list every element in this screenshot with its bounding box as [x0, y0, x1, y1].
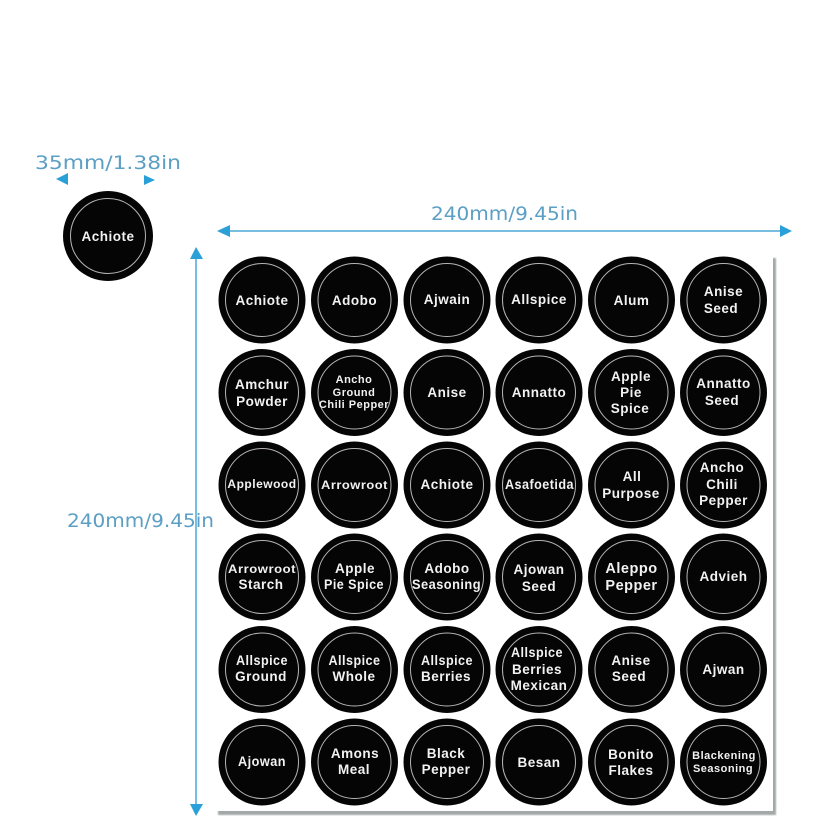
sticker: Allspice Berries Mexican: Mexican [511, 678, 567, 693]
sticker: Aleppo Pepper: Pepper [605, 578, 658, 594]
sticker: Apple Pie Spice [588, 349, 675, 436]
sticker: Achiote [218, 256, 306, 344]
sticker: Ancho Chili Pepper: Ancho [700, 460, 744, 475]
sticker: Arrowroot Starch: Starch [238, 577, 284, 592]
sticker: Anise Seed: Seed [612, 669, 646, 684]
sticker: Amons Meal: Amons [331, 746, 379, 761]
sticker: Allspice: Allspice [511, 292, 567, 307]
sticker: Besan [496, 718, 582, 806]
sticker: Adobo Seasoning [404, 534, 490, 620]
sticker: Anise Seed [680, 256, 767, 344]
dimension: sheet height [67, 247, 214, 816]
sticker: Arrowroot Starch [218, 534, 306, 620]
dimension: sticker diameter [35, 152, 181, 185]
sticker: Apple Pie Spice: Spice [611, 401, 649, 416]
sticker: Achiote [404, 442, 490, 528]
sticker sheet [214, 254, 776, 815]
single sample sticker: Achiote [81, 229, 135, 244]
dimension: sticker diameter: 35mm/1.38in [35, 152, 181, 174]
sticker: Allspice Berries Mexican: Allspice [511, 645, 563, 660]
sticker: Apple Pie Spice: Pie [620, 385, 642, 400]
sticker: Ajwain [404, 256, 490, 344]
sticker: Asafoetida [496, 442, 582, 528]
sticker: Ajwan: Ajwan [702, 662, 745, 677]
sticker: Black Pepper [404, 718, 490, 806]
sticker: Ancho Chili Pepper [680, 442, 767, 528]
sticker: Adobo Seasoning: Seasoning [412, 577, 481, 592]
sticker: Annatto Seed: Annatto [696, 376, 751, 391]
sticker: Blackening Seasoning: Blackening [692, 750, 756, 762]
sticker: Aleppo Pepper [588, 534, 675, 620]
sticker: Arrowroot: Arrowroot [321, 478, 388, 492]
sticker: Black Pepper: Black [427, 746, 465, 761]
sticker: Apple Pie Spice: Apple [611, 369, 651, 384]
sticker: Ajowan Seed: Ajowan [513, 562, 565, 577]
sticker: Ancho Ground Chili Pepper: Chili Pepper [319, 399, 389, 411]
dimension: sheet height: 240mm/9.45in [67, 510, 214, 532]
sticker: Amchur Powder: Powder [236, 394, 288, 409]
sticker: Achiote: Achiote [420, 477, 474, 492]
sticker: Anise Seed: Seed [704, 301, 738, 316]
sticker: Anise Seed: Anise [704, 284, 743, 299]
sticker: Advieh: Advieh [699, 569, 748, 584]
sticker: Apple Pie Spice: Apple [335, 561, 375, 576]
sticker: Ancho Chili Pepper: Chili [706, 477, 738, 492]
sticker: Blackening Seasoning [680, 718, 767, 806]
sticker: Allspice [496, 256, 582, 344]
sticker: Bonito Flakes [588, 718, 675, 806]
sticker: Besan: Besan [517, 755, 561, 770]
sticker: Blackening Seasoning: Seasoning [693, 763, 753, 775]
sticker: Amons Meal [311, 718, 398, 806]
sticker: Achiote: Achiote [235, 293, 289, 308]
sticker: All Purpose: All [623, 469, 641, 484]
sticker: All Purpose: Purpose [602, 486, 660, 501]
sticker: Amchur Powder [218, 349, 306, 436]
sticker: Arrowroot Starch: Arrowroot [228, 562, 296, 576]
sticker: Allspice Berries: Allspice [421, 653, 473, 668]
sticker: Ajowan Seed: Seed [522, 579, 556, 594]
sticker: Apple Pie Spice [311, 534, 398, 620]
sticker: Annatto [496, 349, 582, 436]
sticker: Adobo [311, 256, 398, 344]
sticker: Allspice Ground: Allspice [236, 653, 288, 668]
sticker: Allspice Ground [218, 626, 306, 713]
sticker: Advieh [680, 534, 767, 620]
sticker: Allspice Whole: Whole [332, 669, 376, 684]
sticker: Ancho Ground Chili Pepper: Ground [333, 387, 375, 399]
single sample sticker [63, 191, 153, 281]
sticker: Ancho Chili Pepper: Pepper [699, 493, 748, 508]
dimension: sheet width [217, 203, 792, 237]
sticker: Allspice Ground: Ground [235, 669, 287, 684]
sticker: Annatto Seed [680, 349, 767, 436]
sticker: Allspice Berries Mexican: Berries [512, 662, 562, 677]
sticker: Ancho Ground Chili Pepper: Ancho [336, 374, 372, 386]
sticker: Amons Meal: Meal [338, 762, 370, 777]
sticker: Asafoetida: Asafoetida [505, 477, 574, 492]
sticker: Ajwan [680, 626, 767, 713]
sticker: Annatto: Annatto [512, 385, 566, 400]
sticker: All Purpose [588, 442, 675, 528]
sticker: Allspice Whole [311, 626, 398, 713]
sticker: Ajwain: Ajwain [424, 292, 470, 307]
sticker: Bonito Flakes: Flakes [608, 763, 654, 778]
sticker: Annatto Seed: Seed [705, 393, 739, 408]
sticker: Amchur Powder: Amchur [235, 377, 289, 392]
sticker: Black Pepper: Pepper [422, 762, 471, 777]
sticker: Ajowan [218, 718, 306, 806]
sticker: Anise: Anise [427, 385, 467, 400]
sticker: Ancho Ground Chili Pepper [311, 349, 398, 436]
sticker: Anise [404, 349, 490, 436]
sticker: Alum: Alum [614, 293, 649, 308]
sticker: Arrowroot [311, 442, 398, 528]
sticker: Apple Pie Spice: Pie Spice [324, 577, 384, 592]
dimension: sheet width: 240mm/9.45in [431, 203, 578, 225]
sticker: Applewood [218, 442, 306, 528]
sticker: Anise Seed: Anise [611, 653, 651, 668]
sticker: Ajowan Seed [496, 534, 582, 620]
sticker: Allspice Whole: Allspice [328, 653, 380, 668]
sticker: Alum [588, 256, 675, 344]
sticker: Allspice Berries: Berries [421, 669, 471, 684]
sticker: Aleppo Pepper: Aleppo [605, 561, 658, 577]
sticker: Allspice Berries Mexican [496, 626, 582, 713]
sticker: Adobo Seasoning: Adobo [424, 561, 470, 576]
sticker: Applewood: Applewood [227, 477, 297, 491]
sticker: Ajowan: Ajowan [238, 754, 286, 769]
sticker: Anise Seed [588, 626, 675, 713]
sticker: Adobo: Adobo [332, 293, 377, 308]
sticker: Allspice Berries [404, 626, 490, 713]
sticker: Bonito Flakes: Bonito [608, 747, 654, 762]
